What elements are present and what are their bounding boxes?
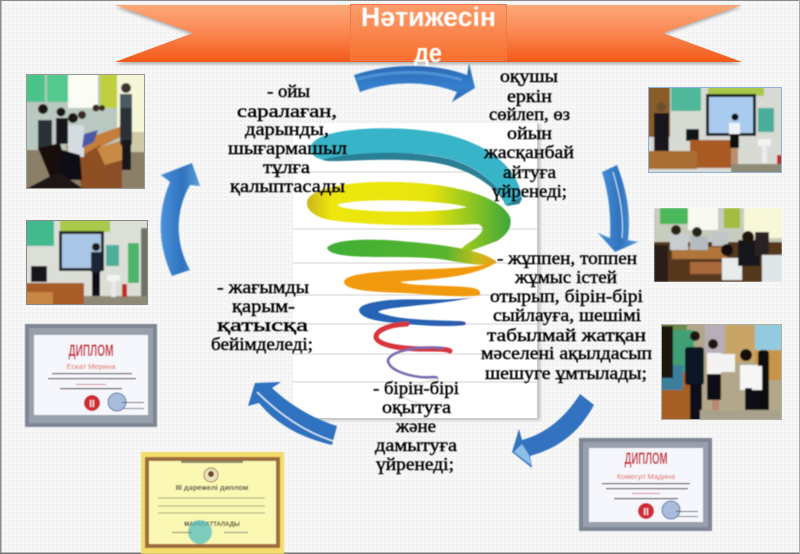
text block: right: мәселені ақылдасып [481, 343, 652, 363]
photo: diploma, Комегул Мадина: Комегул Мадина [617, 472, 676, 481]
text block: top right: айтуға [503, 162, 556, 182]
text block: bottom: дамытуға [375, 435, 457, 455]
arrow: bottom left, pointing up-left [248, 382, 337, 445]
arrow: left, pointing up [161, 163, 200, 276]
text block: top right: ойын [507, 123, 552, 143]
text block: right: табылмай жатқан [487, 325, 646, 345]
spiral: orange coil [344, 262, 497, 296]
photo: diploma, Ескат Мерина [25, 324, 157, 427]
text block: top left: тұлға [263, 157, 310, 177]
photo: students presenting [661, 324, 782, 420]
spiral: blue coil [359, 296, 478, 326]
panel: spiral background [293, 123, 540, 420]
text block: top left: саралаған, [237, 101, 337, 121]
photo: diploma, Комегул Мадина: ДИПЛОМ [624, 449, 668, 468]
arrow: right, pointing down [598, 165, 638, 252]
text block: left: - жағымды [217, 277, 309, 297]
text block: top right: жасқанбай [483, 142, 574, 162]
photo: diploma, Ескат Мерина: ДИПЛОМ [68, 341, 114, 360]
text block: top left [228, 81, 347, 196]
text block: top left: дарынды, [245, 119, 329, 139]
photo: classroom with teacher [26, 74, 145, 189]
text block: right: шешуге ұмтылады; [485, 363, 647, 383]
text block: right: жұмыс істей [514, 267, 617, 287]
text block: top right: еркін [507, 86, 552, 106]
text block: left [211, 277, 313, 354]
text block: bottom: оқытуға [382, 397, 451, 417]
title box [350, 2, 506, 68]
text block: right: отырып, бірін-бірі [490, 286, 643, 306]
text block: bottom [373, 378, 459, 474]
text block: right: - жұппен, топпен [497, 248, 637, 268]
spiral: teal coil [311, 128, 522, 206]
text block: top right [483, 66, 574, 201]
text block: bottom: - бірін-бірі [373, 378, 459, 398]
title box: Нәтижесін [361, 2, 496, 32]
spiral: purple coil [388, 348, 443, 378]
chart: rainbow spiral [307, 128, 522, 403]
spiral: green coil [327, 240, 497, 265]
text block: top right: сөйлеп, өз [489, 104, 570, 124]
text block: left: бейімделеді; [211, 334, 313, 354]
text block: right [481, 248, 652, 383]
photo: pupils raising hands [654, 208, 782, 282]
photo: diploma, Ескат Мерина: II [89, 399, 95, 410]
text block: top left: - ойы [267, 81, 310, 101]
photo: yellow third-degree diploma: ІІІ дәрежелі диплом [176, 483, 249, 492]
text block: left: қатысқа [217, 315, 308, 335]
spiral: red coil [376, 324, 450, 351]
arrow: top, pointing right [354, 63, 475, 102]
text block: bottom: және [395, 416, 436, 436]
spiral: faint tail [403, 379, 437, 403]
photo: diploma, Комегул Мадина: II [643, 507, 649, 518]
text block: right: сыйлауға, шешімі [493, 305, 641, 325]
banner ribbon [115, 5, 742, 64]
photo: student at board with teacher [648, 87, 782, 173]
text block: top right: оқушы [500, 66, 558, 86]
spiral: yellow coil [307, 182, 511, 251]
text block: top right: үйренеді; [492, 181, 567, 201]
photo: diploma, Комегул Мадина [579, 438, 712, 531]
photo: diploma, Ескат Мерина: Ескат Мерина [67, 362, 116, 371]
arrow: lower right, pointing lower-left [512, 394, 594, 468]
text block: left: қарым- [232, 296, 295, 316]
text block: bottom: үйренеді; [376, 454, 454, 474]
photo: student at whiteboard [26, 220, 148, 305]
text block: top left: шығармашыл [228, 138, 347, 158]
photo: yellow third-degree diploma: МАРАПАТТАЛАДЫ [184, 522, 240, 528]
text block: top left: қалыптасады [230, 176, 345, 196]
title box: де [414, 38, 442, 68]
photo: yellow third-degree diploma [141, 452, 284, 554]
